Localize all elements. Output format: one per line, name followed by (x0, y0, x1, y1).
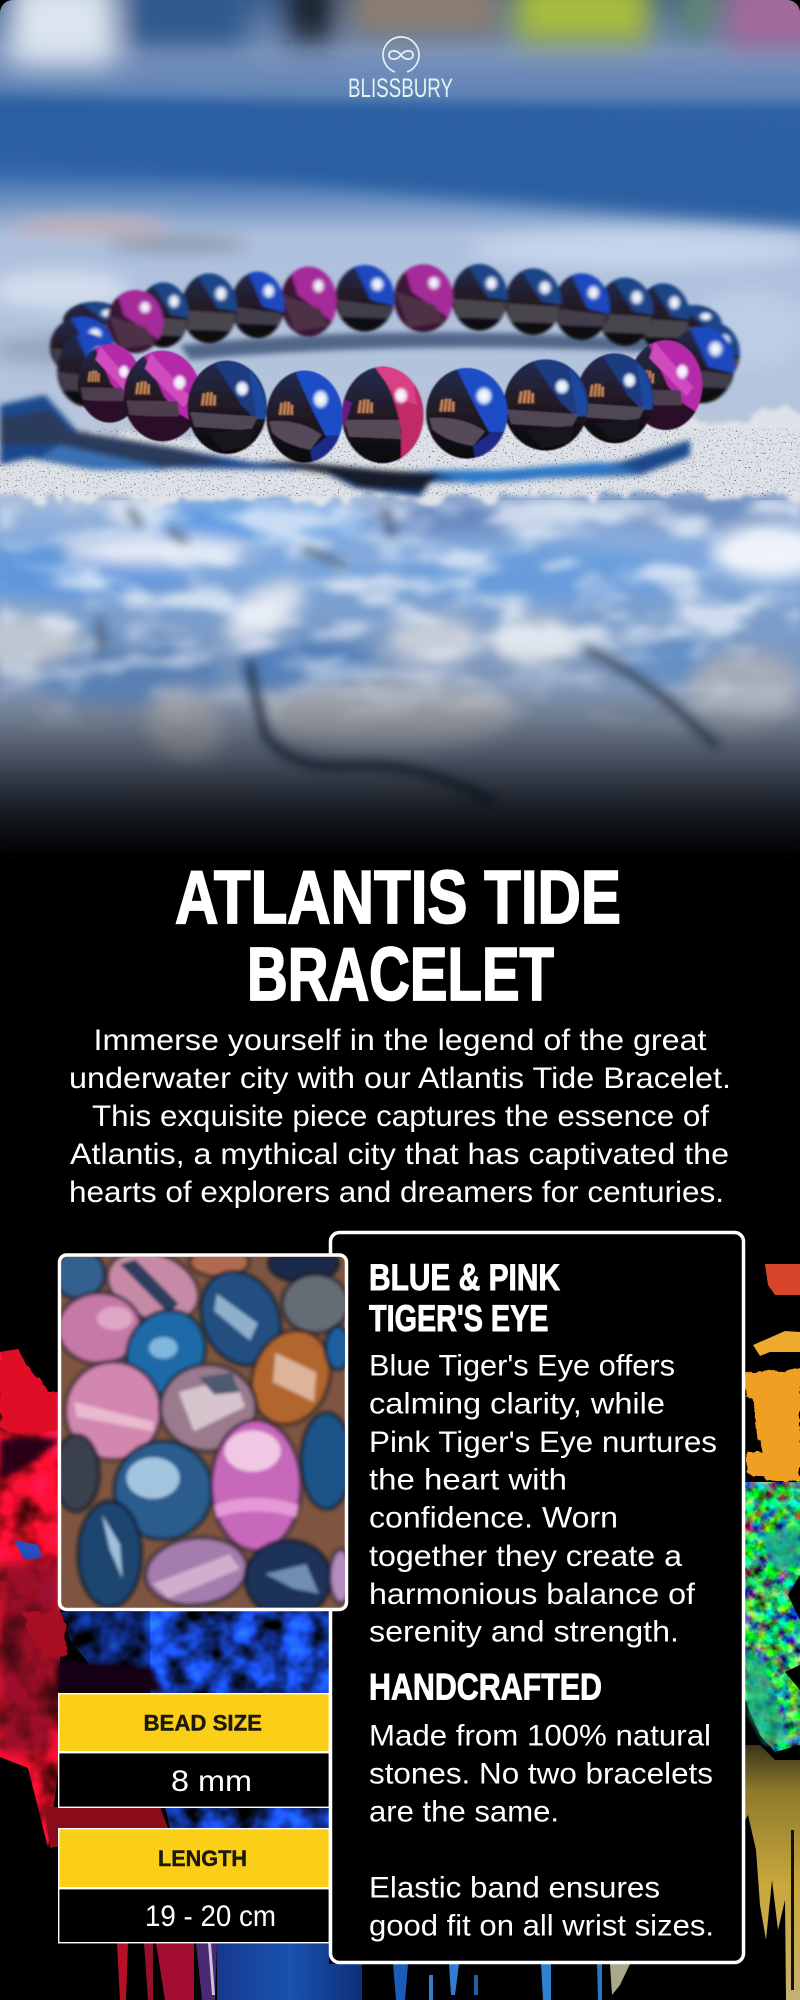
value: 8 mm (59, 1753, 329, 1807)
label: length: LENGTH (158, 1846, 247, 1871)
label: length (59, 1829, 329, 1888)
heading: stone name: TIGER'S EYE (369, 1298, 548, 1339)
handcrafted description: Made from 100% natural (369, 1720, 711, 1752)
gritty stone band (0, 415, 800, 500)
blue spot in the red (14, 1540, 42, 1560)
title (175, 855, 621, 1016)
bottom fade to black (0, 690, 800, 858)
bright red cloud (0, 1350, 60, 1436)
stone description: the heart with (369, 1464, 567, 1496)
handcrafted description (369, 1720, 714, 1942)
white mottled stone (0, 500, 800, 740)
lower crimson shade (0, 1560, 60, 1755)
brand logo (348, 37, 453, 103)
value: 19 - 20 cm: 19 - 20 cm (145, 1900, 276, 1933)
paint splatter: right yellow and green (745, 1264, 800, 1752)
green powder (745, 1482, 800, 1752)
hero photo: bracelet on cracked stone (0, 0, 800, 858)
handcrafted description: stones. No two bracelets (369, 1758, 713, 1790)
stone description: Blue Tiger's Eye offers (369, 1350, 675, 1382)
spec table: length (59, 1829, 329, 1943)
spec table: bead size (59, 1694, 329, 1807)
intro paragraph: underwater city with our Atlantis Tide Bracelet. (69, 1062, 731, 1095)
blurred street background (10, 0, 800, 65)
handcrafted description: are the same. (369, 1796, 559, 1828)
paint drips: bottom (117, 1943, 630, 2000)
label: bead size (59, 1694, 329, 1752)
brand name: BLISSBURY (348, 73, 453, 103)
intro paragraph: hearts of explorers and dreamers for centuries. (69, 1176, 724, 1209)
red orange top (765, 1264, 800, 1295)
value: 8 mm: 8 mm (171, 1765, 252, 1798)
intro paragraph: Atlantis, a mythical city that has captivated the (70, 1138, 729, 1171)
left dark blue cloud (62, 1612, 150, 1670)
heading: stone name (369, 1257, 560, 1339)
red strip between table rows (44, 1807, 168, 1848)
icon: infinity ring (383, 37, 419, 72)
dark gap in the red (0, 1436, 60, 1480)
stone description: harmonious balance of (369, 1578, 696, 1611)
heading: stone name: BLUE & PINK (369, 1257, 560, 1298)
photo: tumbled tiger's eye stones (54, 1238, 352, 1617)
cracks in stone (100, 510, 715, 800)
teal blob (760, 1525, 800, 1570)
teal lower blob (745, 1650, 790, 1745)
red speckle (20, 1612, 68, 1660)
stone description: serenity and strength. (369, 1616, 679, 1648)
title: ATLANTIS TIDE (175, 855, 621, 939)
panel: stone details (330, 1232, 744, 1962)
blurred blue road (0, 95, 800, 228)
blue powder behind the table (150, 1610, 329, 1693)
orange yellow block (745, 1368, 800, 1482)
dark patch (58, 1660, 165, 1693)
handcrafted description: good fit on all wrist sizes. (369, 1910, 714, 1942)
title: BRACELET (247, 932, 554, 1016)
red powder (0, 1349, 60, 1848)
stone description: Pink Tiger's Eye nurtures (369, 1426, 717, 1459)
yellow streak (753, 1331, 800, 1356)
paint drips: right khaki (745, 1745, 800, 2000)
front row of beads (78, 335, 706, 468)
back row shadow (180, 332, 660, 360)
back row of beads (50, 262, 742, 407)
stone description (369, 1350, 717, 1648)
blue and grey blurred stone (0, 492, 800, 777)
heading: handcrafted: HANDCRAFTED (369, 1666, 602, 1708)
stone description: together they create a (369, 1540, 683, 1573)
stone description: confidence. Worn (369, 1502, 618, 1534)
label: bead size: BEAD SIZE (144, 1710, 262, 1736)
intro paragraph: Immerse yourself in the legend of the great (94, 1024, 706, 1057)
intro paragraph (69, 1024, 731, 1209)
bracelet shadow on stone (0, 395, 690, 497)
stone description: calming clarity, while (369, 1388, 665, 1420)
pale pavement tones (0, 217, 800, 370)
blue strip between table rows (165, 1807, 329, 1828)
value: 19 - 20 cm (59, 1889, 329, 1943)
bracelet beads (50, 262, 742, 468)
paint splatter: left red and blue (0, 1349, 329, 1848)
handcrafted description: Elastic band ensures (369, 1872, 660, 1904)
intro paragraph: This exquisite piece captures the essence of (92, 1100, 710, 1133)
